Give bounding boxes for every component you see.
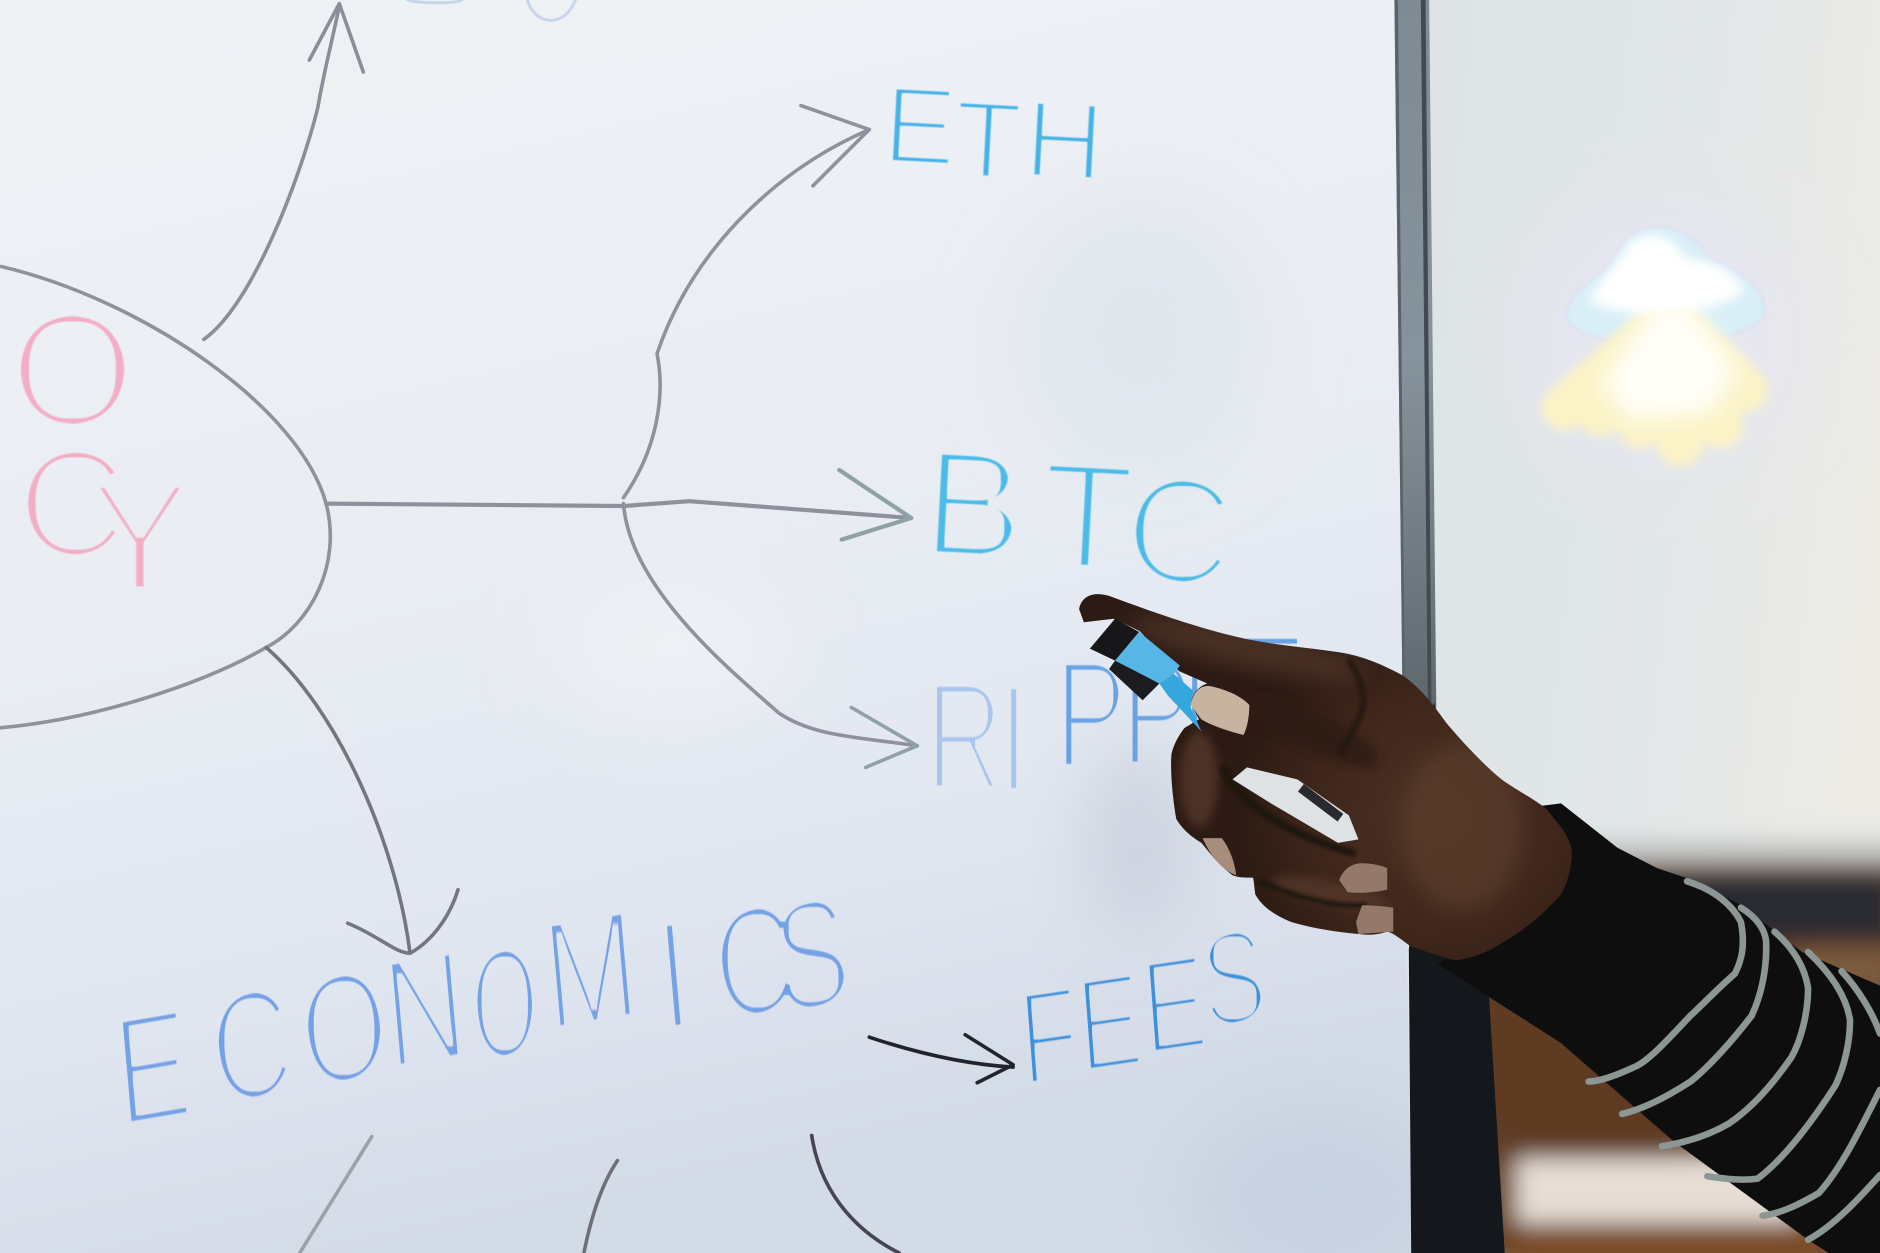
hand holding marker xyxy=(1079,594,1572,960)
arrow: to FEES xyxy=(869,1035,1013,1083)
mind map oval xyxy=(0,266,330,728)
central topic text xyxy=(0,280,191,623)
label: BTC: BTC xyxy=(919,418,1238,619)
little fingernail xyxy=(1356,905,1393,934)
arrow: up from oval xyxy=(204,0,576,339)
sleeve xyxy=(1438,803,1880,1253)
label: RIPPLE xyxy=(926,603,1306,825)
middle fingernail xyxy=(1203,838,1236,875)
board frame xyxy=(1394,0,1505,1253)
ring fingernail xyxy=(1339,863,1387,893)
thumbnail xyxy=(1191,686,1249,735)
marker xyxy=(1090,619,1358,843)
lower branch strokes xyxy=(300,1135,899,1253)
background: wall behind the board xyxy=(1403,0,1880,1253)
label: ECONOMICS: ECON xyxy=(108,916,473,1160)
whiteboard surface xyxy=(0,0,1451,1253)
label: ECONOMICS: MICS xyxy=(537,862,857,1064)
arrow: to ECONOMICS xyxy=(266,647,458,953)
label: ECONOMICS: O xyxy=(468,912,541,1095)
label: RIPPLE: PPLE xyxy=(1055,603,1306,801)
label: FEES: FEES xyxy=(1014,898,1271,1115)
arrow: to RIPPLE xyxy=(623,504,917,767)
label: ECONOMICS xyxy=(108,862,857,1160)
arrow: to BTC xyxy=(326,470,911,540)
arrow: to ETH xyxy=(623,106,869,498)
label: ETH: ETH xyxy=(880,63,1107,204)
light reflection on the wall xyxy=(1517,204,1804,468)
central topic text: O xyxy=(10,280,135,461)
hand shading xyxy=(1126,604,1523,917)
label: RIPPLE: RI xyxy=(926,651,1029,825)
